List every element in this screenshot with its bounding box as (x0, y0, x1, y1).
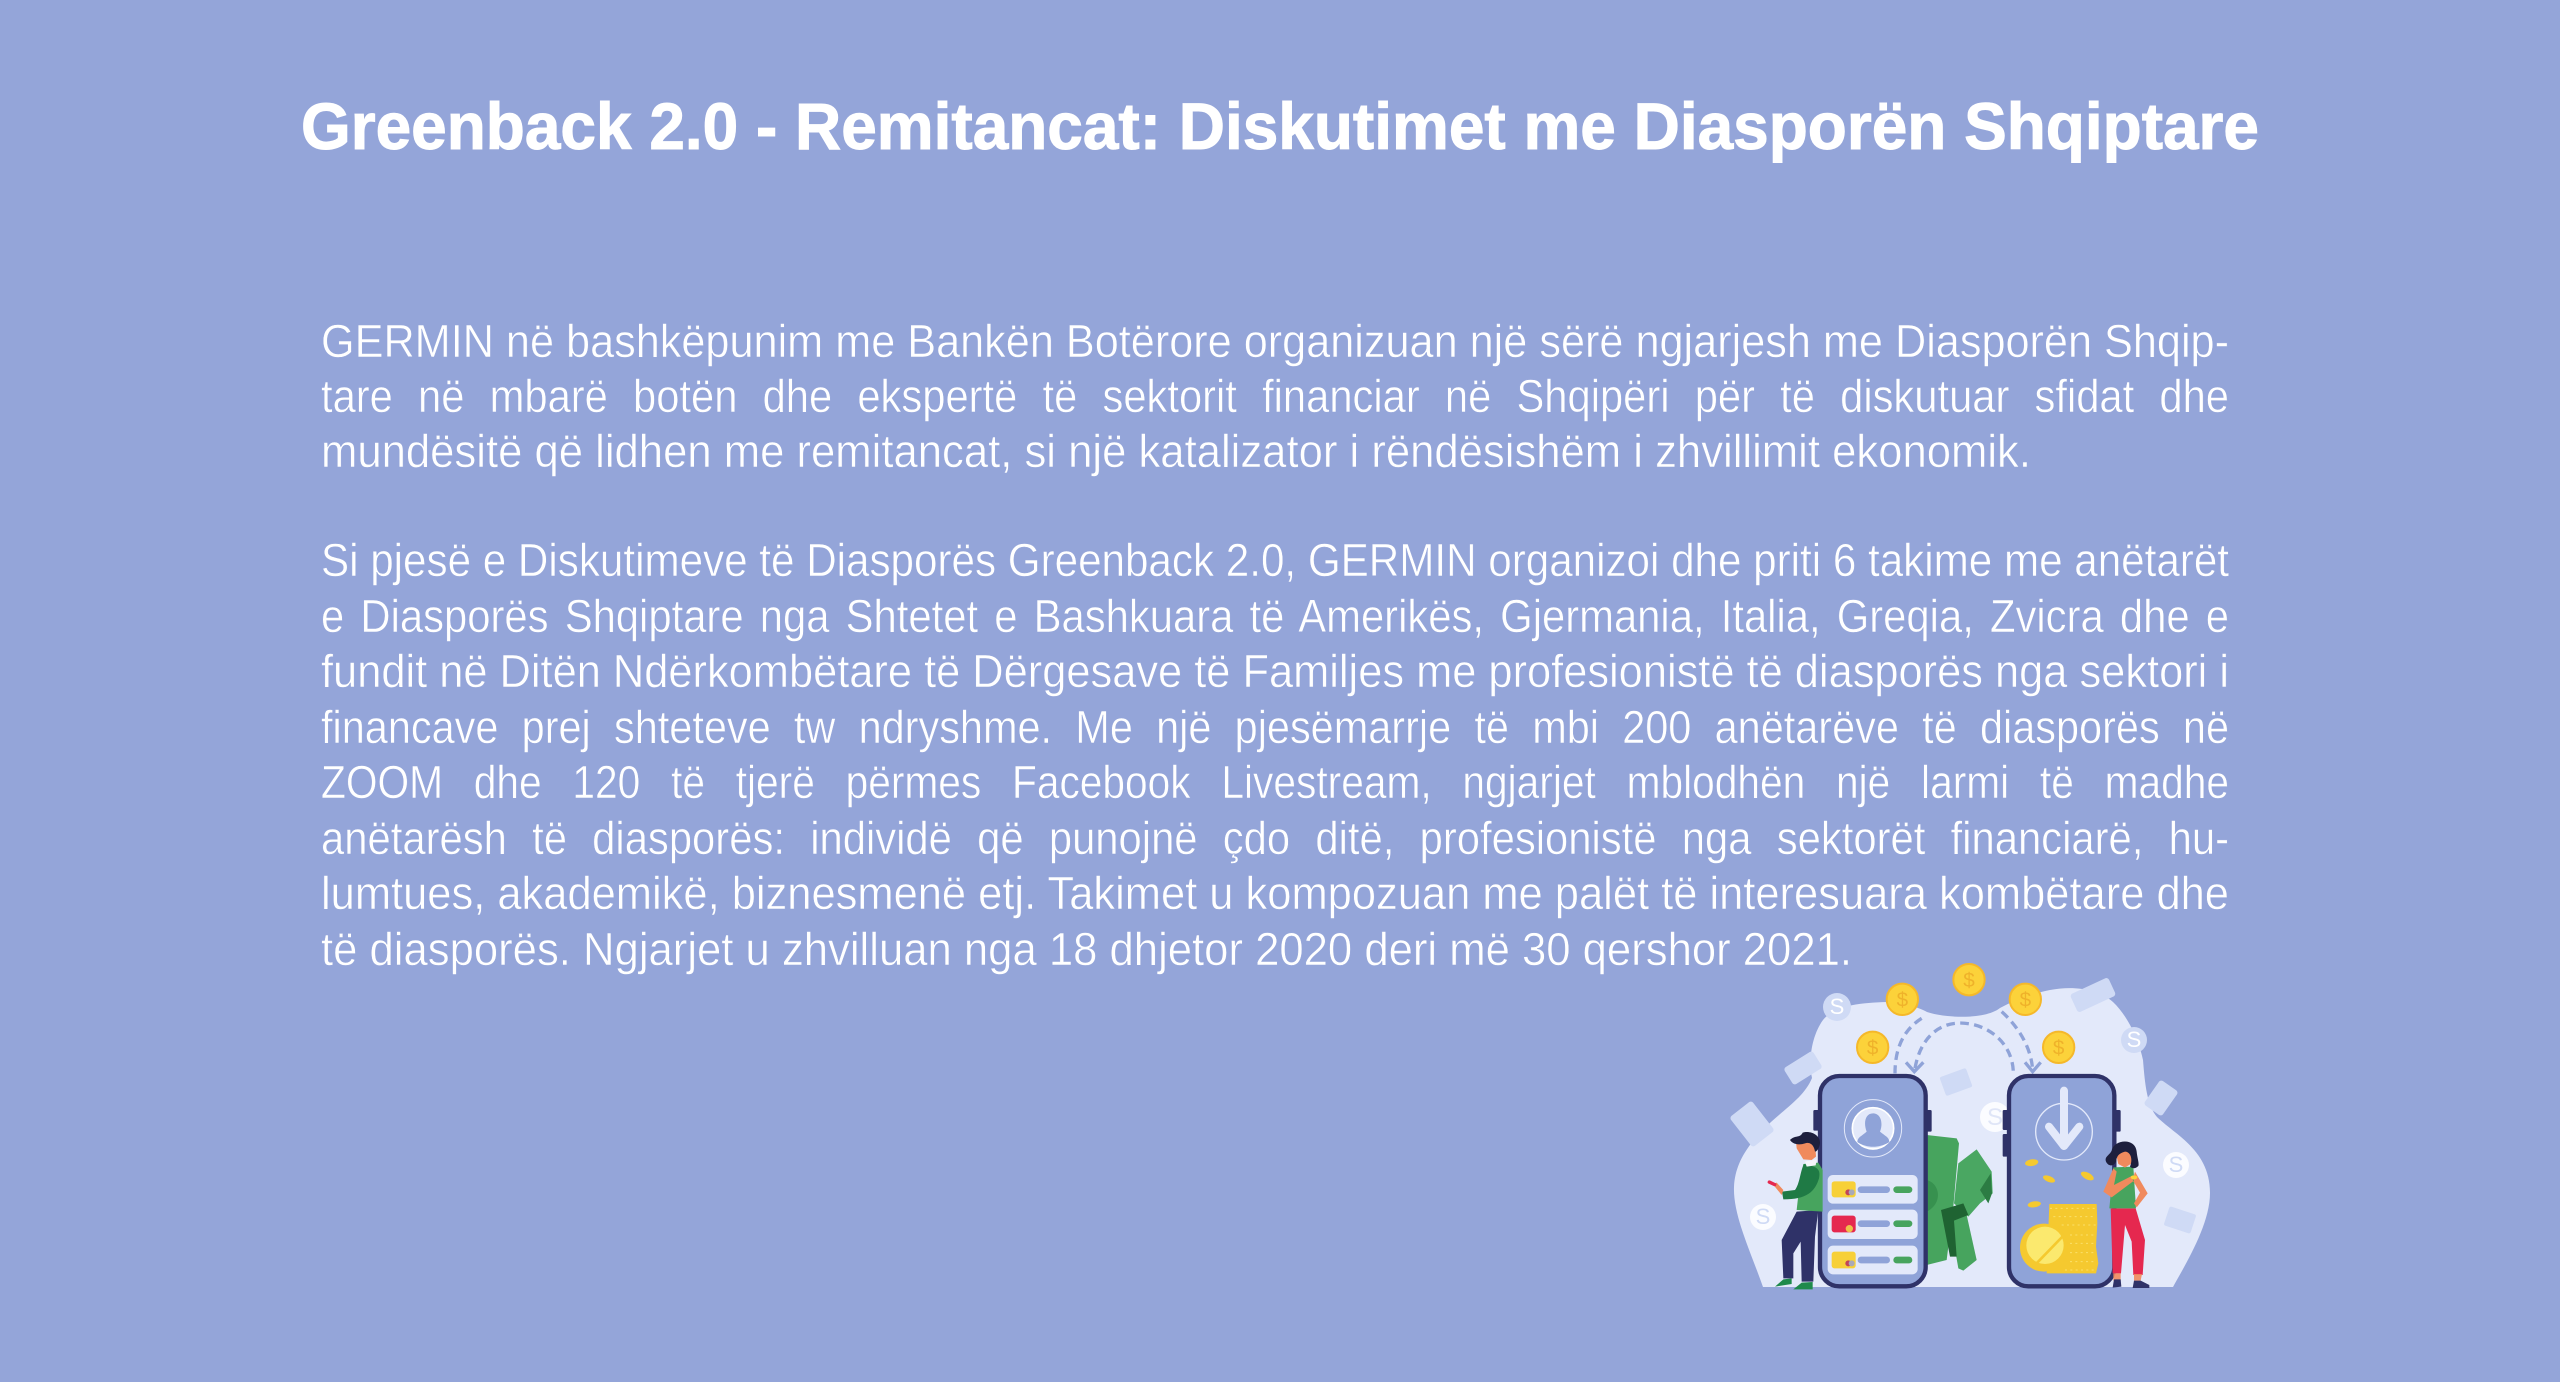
text block: intro paragraph: tare në mbarë botën dhe ekspertë të sektorit financiar në Shqipëri për të diskutuar sfidat dhe (321, 370, 2229, 422)
floating banknotes and money tokens: S (2127, 1027, 2141, 1052)
payment rows (1828, 1175, 1918, 1274)
right phone (2003, 1076, 2121, 1286)
text block: events paragraph: anëtarësh të diasporës: individë që punojnë çdo ditë, profesionistë nga sektorët financiarë, hu- (321, 812, 2229, 864)
falling coins (2025, 1158, 2095, 1208)
man with phone (1767, 1132, 1823, 1289)
left phone (1813, 1076, 1932, 1286)
gold coins: $ (1963, 969, 1975, 992)
text block: events paragraph: financave prej shteteve tw ndryshme. Me një pjesëmarrje të mbi 200 anëtarëve të diasporës në (321, 701, 2229, 753)
background blob (1734, 988, 2210, 1287)
text block: events paragraph: ZOOM dhe 120 të tjerë përmes Facebook Livestream, ngjarjet mblodhën një larmi të madhe (321, 756, 2229, 808)
text block: intro paragraph: GERMIN në bashkëpunim me Bankën Botërore organizuan një sërë ngjarjesh me Diasporën Shqip- (321, 315, 2229, 367)
text block: events paragraph: Si pjesë e Diskutimeve të Diasporës Greenback 2.0, GERMIN organizoi dhe priti 6 takime me anëtarët (321, 534, 2229, 586)
avatar (1844, 1100, 1902, 1157)
title: Greenback 2.0 - Remitancat: Diskutimet me Diasporën Shqiptare (301, 89, 2259, 163)
gold coins: $ (1897, 989, 1909, 1012)
text block: events paragraph (321, 534, 2229, 975)
floating banknotes and money tokens: S (1756, 1204, 1770, 1229)
text block: events paragraph: lumtues, akademikë, biznesmenë etj. Takimet u kompozuan me palët të interesuara kombëtare dhe (321, 867, 2229, 919)
banknote roll (1927, 1135, 1993, 1271)
gold coins: $ (1867, 1037, 1879, 1060)
floating banknotes and money tokens: S (1830, 994, 1844, 1019)
download icon (2036, 1091, 2092, 1160)
text block: intro paragraph: mundësitë që lidhen me remitancat, si një katalizator i rëndësishëm i zhvillimit ekonomik. (321, 425, 2031, 477)
floating banknotes and money tokens (1729, 977, 2196, 1234)
gold coins: $ (2053, 1037, 2065, 1060)
woman with coin (2103, 1142, 2149, 1288)
gold coins (1857, 964, 2074, 1063)
coin stack (2020, 1204, 2098, 1273)
text block: events paragraph: të diasporës. Ngjarjet u zhvilluan nga 18 dhjetor 2020 deri më 30 qershor 2021. (321, 923, 1852, 975)
text block: events paragraph: e Diasporës Shqiptare nga Shtetet e Bashkuara të Amerikës, Gjermania, Italia, Greqia, Zvicra dhe e (321, 590, 2229, 642)
illustration: mobile money transfer (1729, 964, 2210, 1289)
gold coins: $ (2020, 989, 2032, 1012)
floating banknotes and money tokens: S (1987, 1104, 2003, 1131)
floating banknotes and money tokens: S (2169, 1152, 2183, 1177)
dashed arcs with arrowheads (1895, 1012, 2041, 1073)
text block: events paragraph: fundit në Ditën Ndërkombëtare të Dërgesave të Familjes me profesionistë të diasporës nga sektori i (321, 645, 2229, 697)
text block: intro paragraph (321, 315, 2229, 477)
